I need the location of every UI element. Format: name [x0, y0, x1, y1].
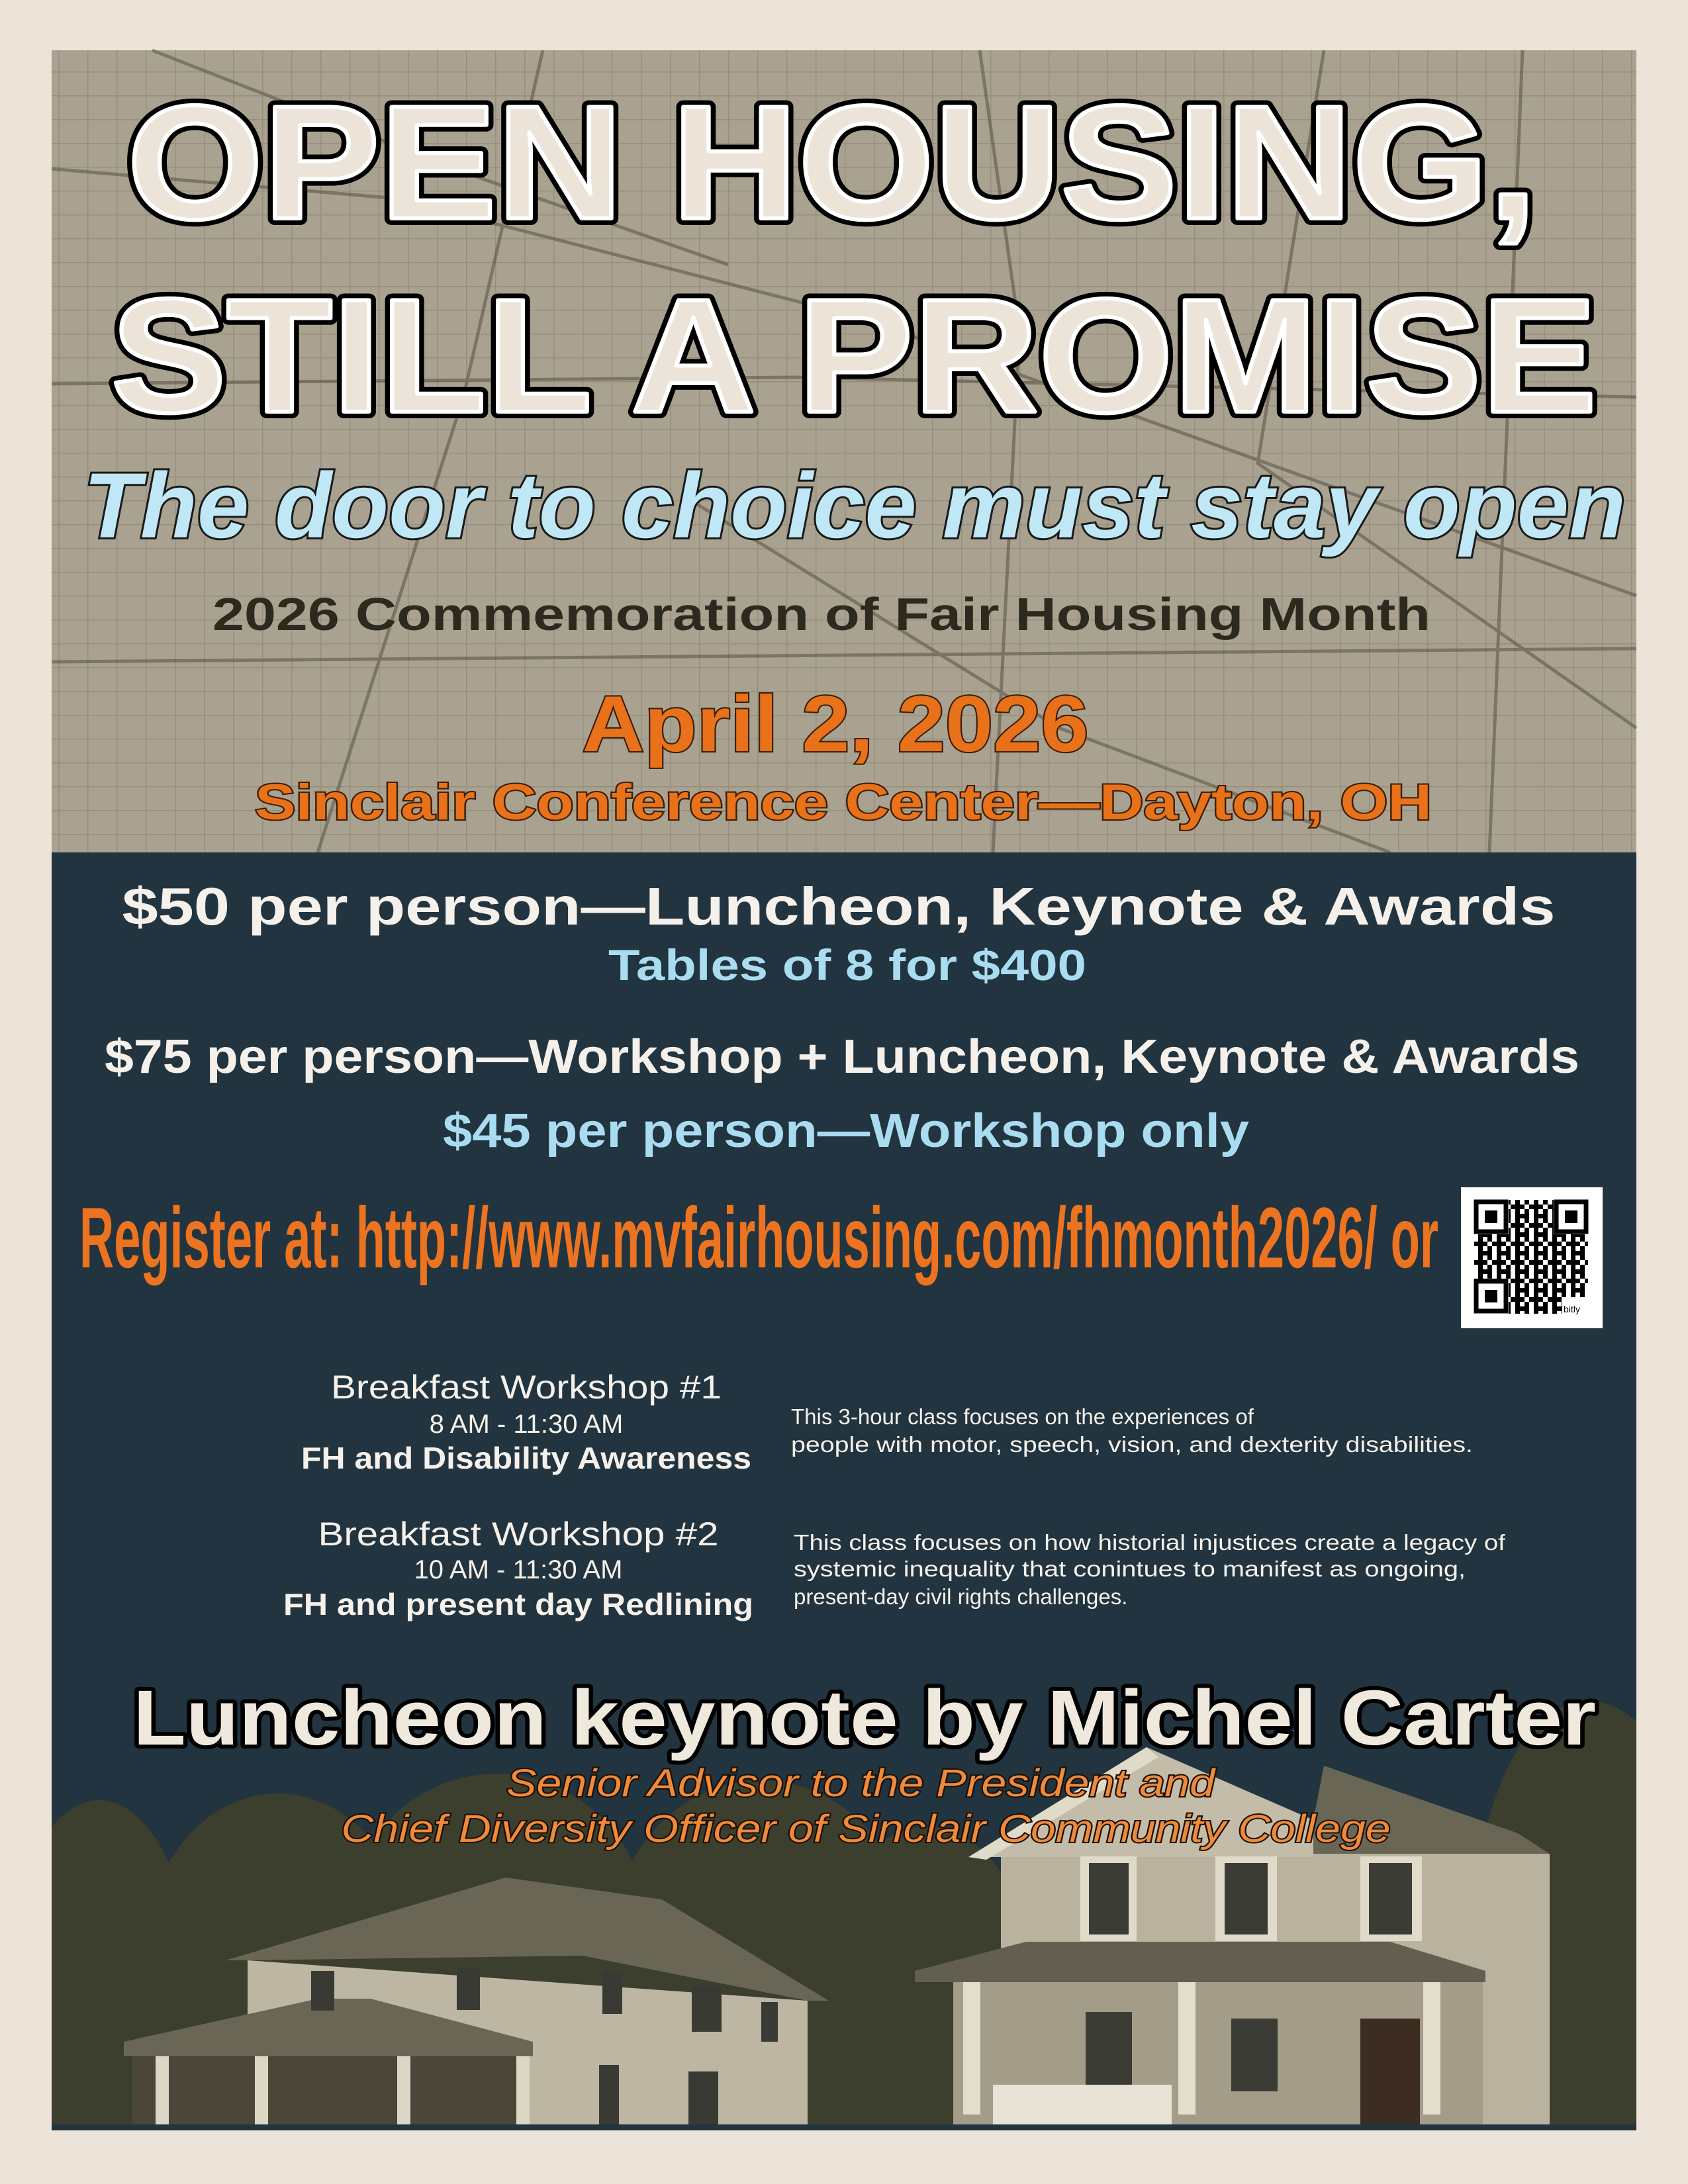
right house: [915, 1747, 1550, 2127]
pricing block: $45 per person—Workshop only: [443, 1105, 1249, 1158]
title line 2: STILL A PROMISE: [111, 265, 1597, 446]
keynote speaker title: [342, 1762, 1390, 1850]
title line 1: OPEN HOUSING,: [127, 71, 1537, 253]
keynote speaker title: Senior Advisor to the President and: [506, 1762, 1216, 1805]
date: April 2, 2026: [583, 680, 1088, 768]
title line 2: STILL A PROMISE: [111, 265, 1597, 446]
workshop 2: [283, 1516, 753, 1621]
panel: navy info section: [52, 852, 1636, 2130]
pricing block: [105, 877, 1579, 1158]
keynote speaker title: Chief Diversity Officer of Sinclair Community College: [342, 1807, 1390, 1850]
keynote heading: Luncheon keynote by Michel Carter: [133, 1674, 1596, 1762]
venue: Sinclair Conference Center—Dayton, OH: [255, 774, 1432, 831]
event description: 2026 Commemoration of Fair Housing Month: [212, 588, 1430, 640]
workshop 1: FH and Disability Awareness: [301, 1441, 751, 1475]
pricing block: $75 per person—Workshop + Luncheon, Keynote & Awards: [105, 1030, 1579, 1083]
panel: map header background: [52, 50, 1636, 852]
workshop 2 description: This class focuses on how historial injustices create a legacy of: [794, 1530, 1506, 1555]
QR code: bitly: [1564, 1304, 1580, 1314]
QR code: [1461, 1187, 1603, 1328]
workshop 2: FH and present day Redlining: [283, 1587, 753, 1621]
workshop 1: [301, 1369, 751, 1475]
pricing block: Tables of 8 for $400: [608, 940, 1086, 989]
pricing block: $50 per person—Luncheon, Keynote & Awards: [122, 877, 1556, 936]
workshop 2: 10 AM - 11:30 AM: [414, 1555, 622, 1584]
workshop 2 description: present-day civil rights challenges.: [794, 1584, 1127, 1609]
subtitle: The door to choice must stay open: [83, 453, 1626, 557]
workshop 1 description: people with motor, speech, vision, and dexterity disabilities.: [791, 1432, 1473, 1457]
workshop 2: Breakfast Workshop #2: [318, 1516, 719, 1553]
workshop 1: Breakfast Workshop #1: [331, 1369, 722, 1406]
illustration: trees and houses: [52, 1702, 1636, 2124]
left house: [124, 1878, 829, 2127]
title line 1: OPEN HOUSING,: [127, 71, 1537, 253]
workshop 1 description: This 3-hour class focuses on the experiences of: [791, 1404, 1254, 1429]
workshop 2 description: systemic inequality that conintues to manifest as ongoing,: [794, 1557, 1466, 1581]
workshop 1: 8 AM - 11:30 AM: [430, 1410, 623, 1439]
workshop 1 description: [791, 1404, 1473, 1457]
workshop 2 description: [794, 1530, 1506, 1609]
